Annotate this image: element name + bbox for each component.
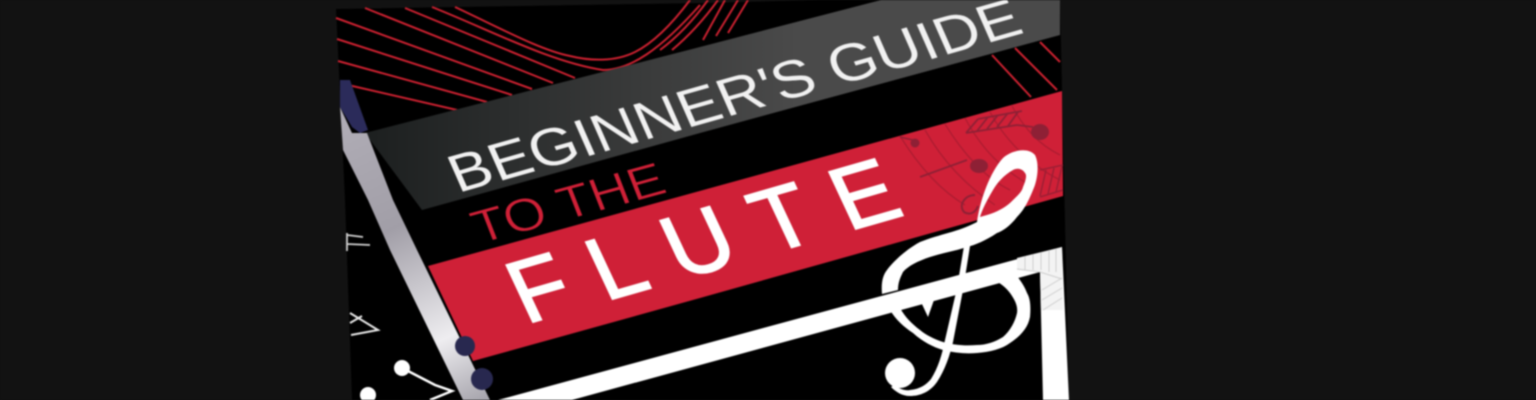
black cover <box>336 0 1069 400</box>
silver flute body <box>340 107 490 400</box>
grey title band <box>365 0 1060 210</box>
navy flute cap <box>340 80 368 133</box>
flute key: upper <box>455 336 475 356</box>
red curved staff lines <box>336 0 1060 110</box>
treble clef <box>880 150 1038 396</box>
red title band <box>428 91 1063 361</box>
dark red music notation <box>900 106 1063 214</box>
title text: to the: TO THE <box>463 152 673 253</box>
white staff frame <box>498 247 1069 400</box>
left edge music fragments <box>347 233 452 400</box>
flute key: lower <box>471 368 493 390</box>
title text: beginner's guide: BEGINNER'S GUIDE <box>439 0 1031 204</box>
title text: flute: FLUTE <box>491 140 915 342</box>
